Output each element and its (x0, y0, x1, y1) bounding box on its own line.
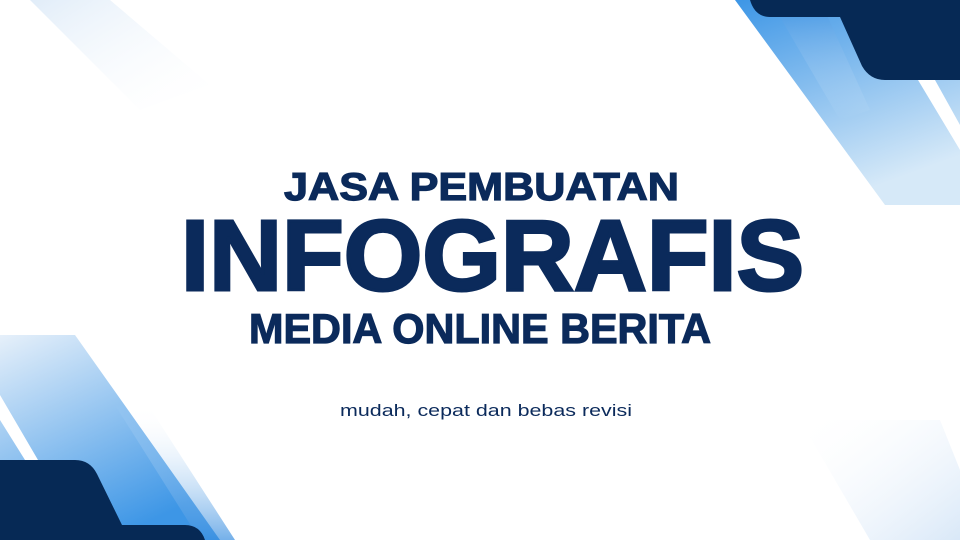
decoration: top-left faint band (30, 0, 210, 110)
decoration: top-right bands (735, 0, 960, 205)
decoration: bottom-right faint band (800, 420, 960, 540)
heading: MEDIA ONLINE BERITA: MEDIA ONLINE BERITA (249, 305, 711, 352)
title: INFOGRAFIS: INFOGRAFIS (181, 200, 804, 312)
subtitle: mudah, cepat dan bebas revisi (340, 401, 632, 420)
decoration: bottom-left bands (0, 335, 235, 540)
heading: JASA PEMBUATAN: JASA PEMBUATAN (284, 166, 679, 209)
